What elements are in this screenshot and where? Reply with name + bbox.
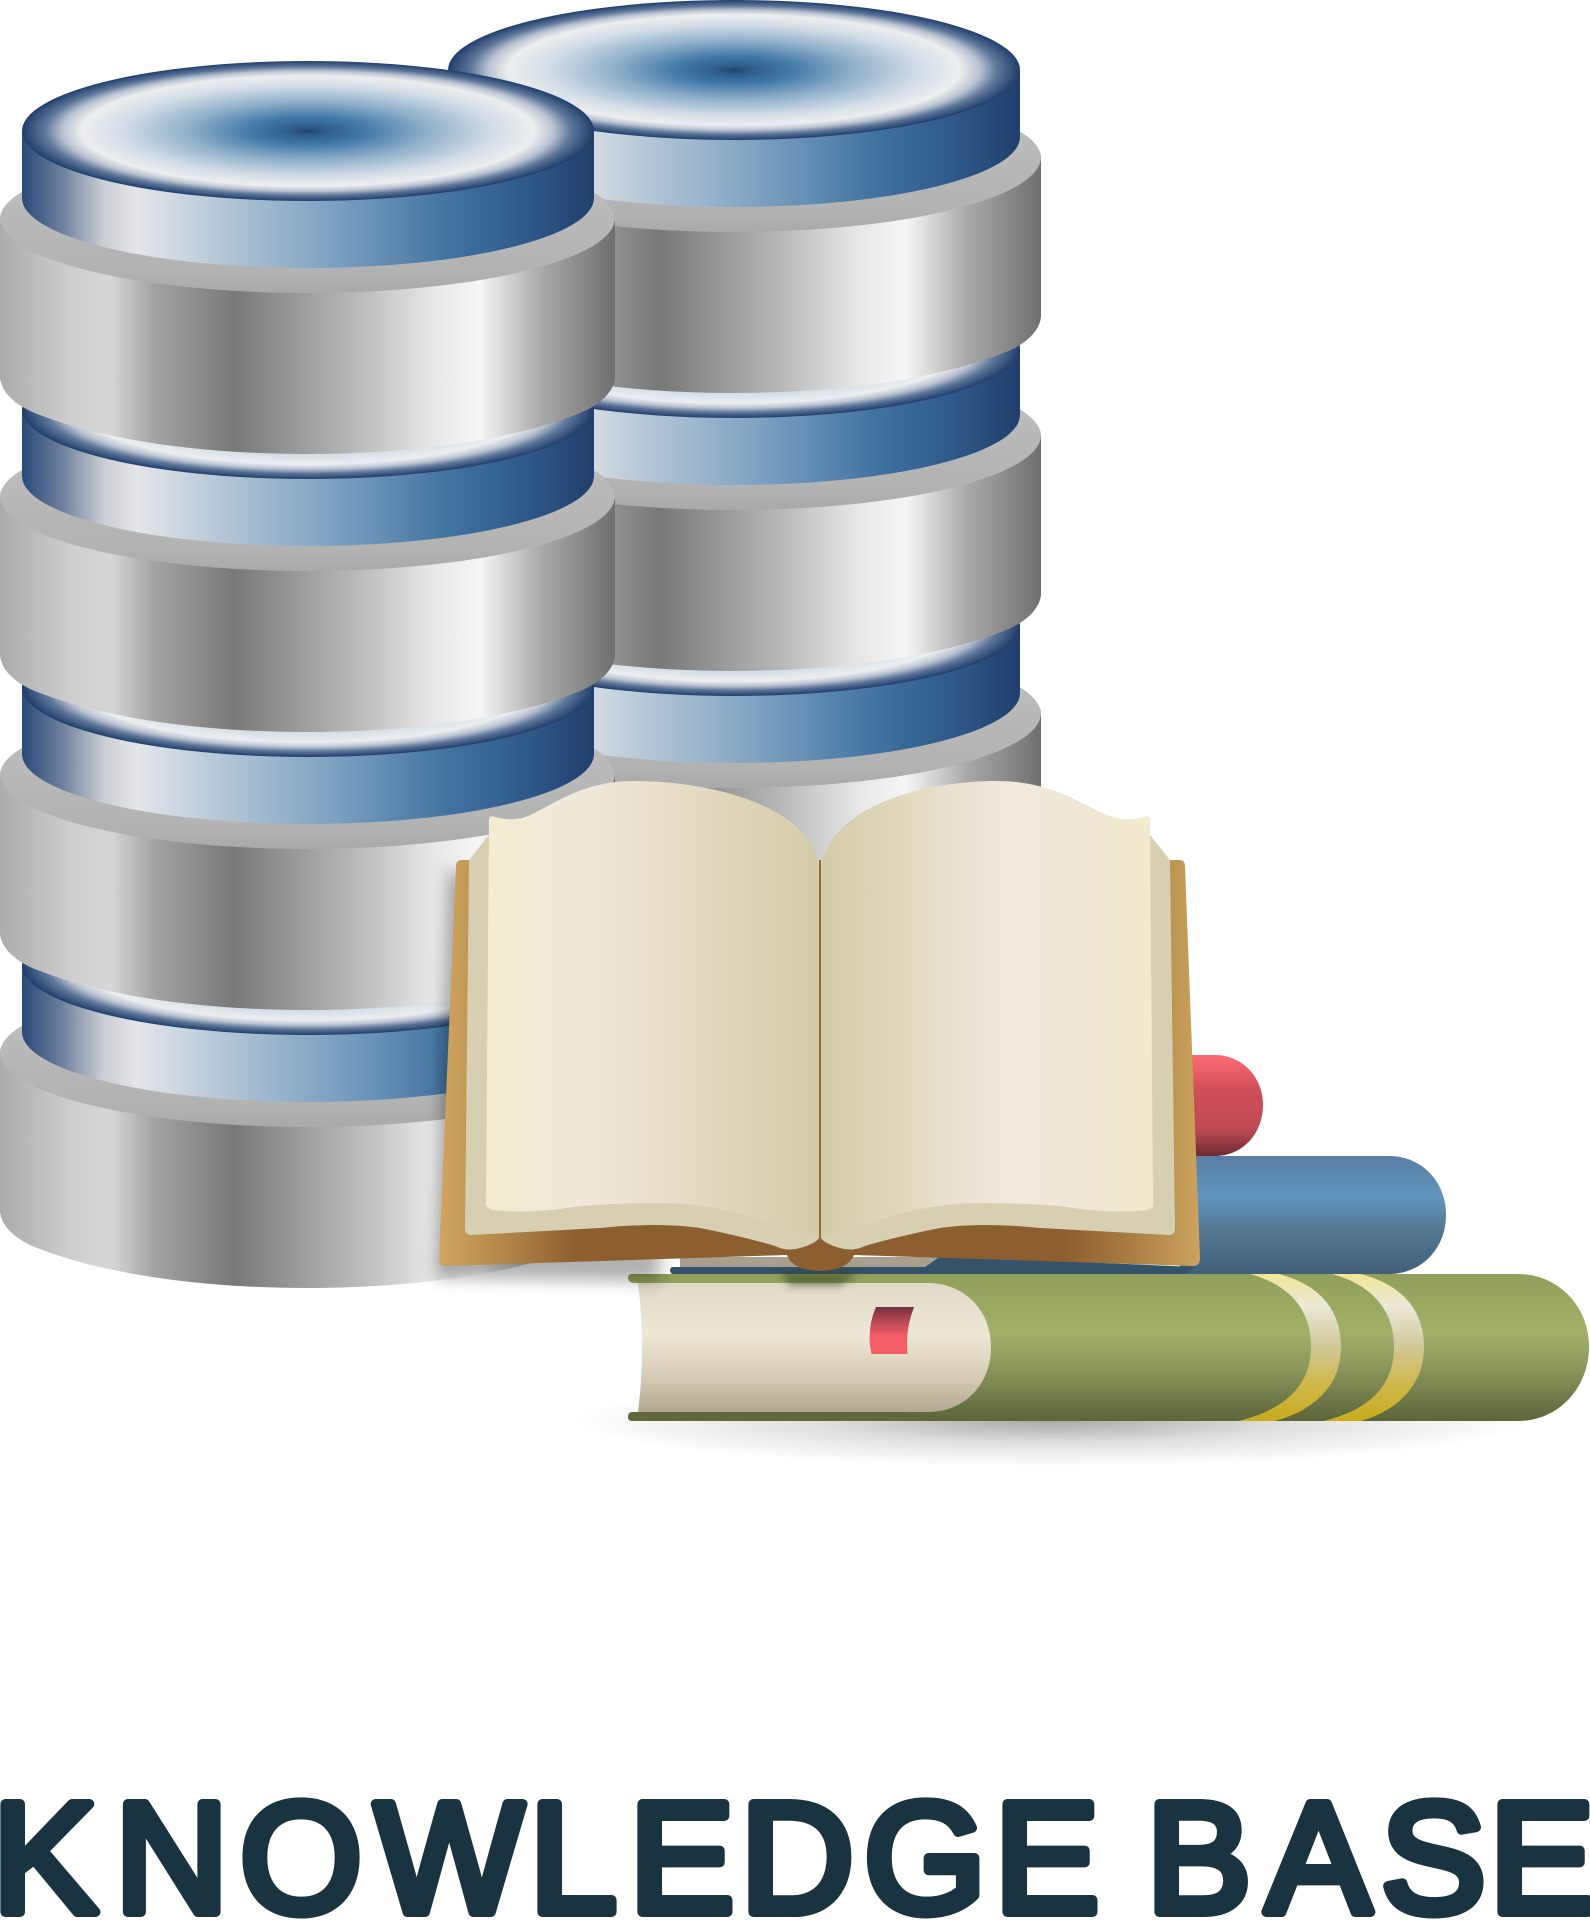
ground shadow — [570, 1375, 1530, 1467]
top cover edge — [628, 1274, 680, 1283]
blue book — [1180, 1156, 1446, 1274]
book pages — [638, 1283, 991, 1412]
left page — [486, 781, 819, 1238]
book cover — [439, 860, 1200, 1271]
bookmark — [870, 1307, 914, 1354]
green book — [628, 1274, 1589, 1421]
right page — [821, 781, 1153, 1238]
open book shadow — [436, 868, 860, 1286]
front database cylinder — [0, 61, 615, 1288]
lower cover edge — [628, 1412, 928, 1421]
back database cylinder — [426, 0, 1041, 1227]
red book — [1180, 1055, 1263, 1156]
gold band one — [1238, 1274, 1341, 1421]
page edges — [465, 835, 819, 1250]
blue book base under open book — [670, 1256, 1195, 1274]
open book — [439, 781, 1200, 1271]
spine line — [819, 860, 821, 1240]
gold band two — [1323, 1274, 1424, 1421]
